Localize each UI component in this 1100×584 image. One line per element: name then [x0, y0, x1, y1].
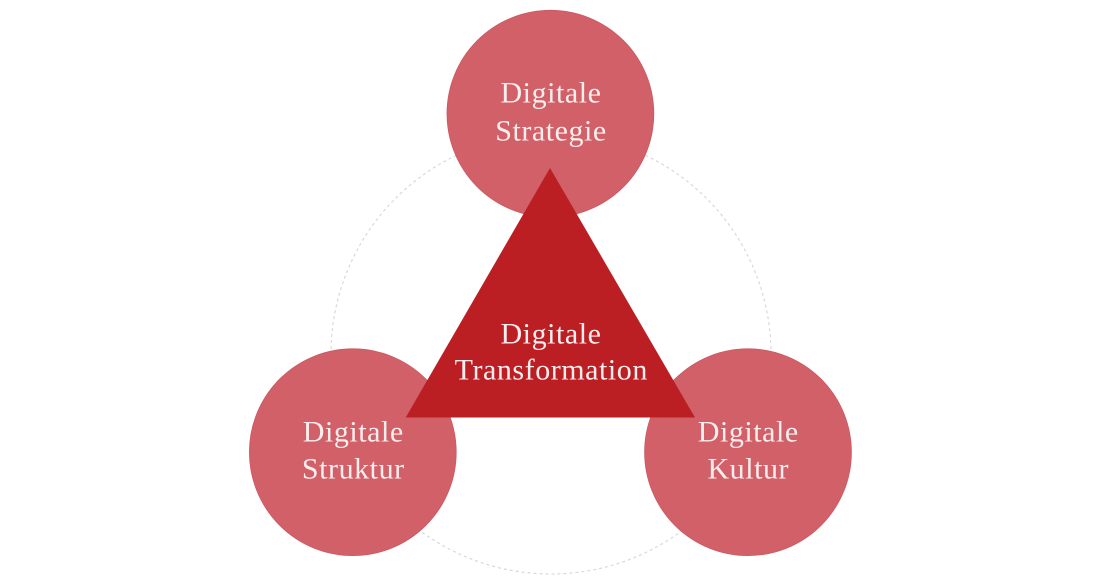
label: Digitale Kultur: [698, 416, 799, 486]
label: Digitale Struktur: Struktur: [302, 452, 405, 486]
label: Digitale Strategie: [495, 76, 607, 148]
label: Digitale Kultur: Digitale: [698, 416, 799, 448]
circle: Digitale Kultur: [645, 349, 851, 556]
label: Digitale Kultur: Kultur: [707, 452, 789, 486]
dashed orbit circle: [331, 134, 771, 574]
label: Digitale Strategie: Strategie: [495, 114, 607, 148]
central triangle: [406, 168, 695, 418]
label: Digitale Transformation: Digitale: [500, 318, 602, 350]
circle: Digitale Strategie: [447, 10, 654, 217]
label: Digitale Transformation: [455, 318, 648, 386]
label: Digitale Struktur: [302, 416, 405, 486]
label: Digitale Strategie: Digitale: [500, 76, 602, 110]
circle: Digitale Struktur: [249, 349, 456, 556]
label: Digitale Transformation: Transformation: [455, 354, 648, 386]
label: Digitale Struktur: Digitale: [303, 416, 404, 448]
